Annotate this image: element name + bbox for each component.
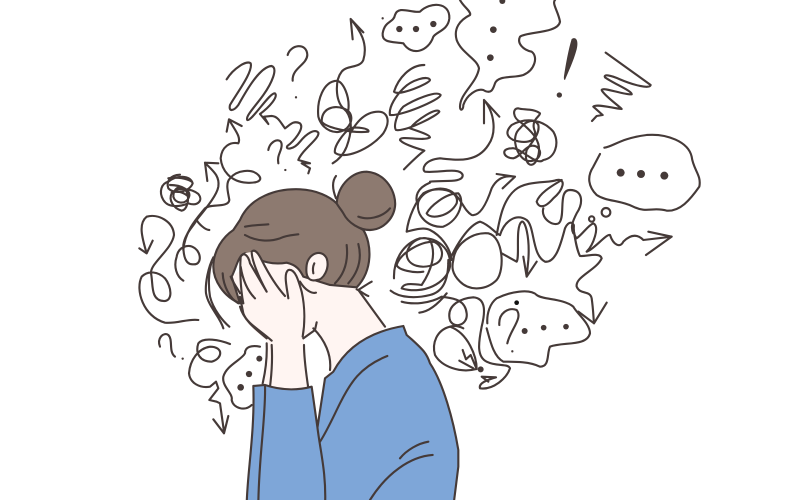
icon: question mark lower xyxy=(159,334,184,360)
loop xyxy=(175,220,200,281)
icon: small question mark xyxy=(268,140,286,171)
arrow: upward looping xyxy=(183,119,260,250)
neck and face skin xyxy=(232,260,387,383)
light bulb xyxy=(434,326,484,372)
small down arrow xyxy=(502,222,537,277)
sweater folds xyxy=(320,356,433,500)
ear xyxy=(306,253,328,280)
arrow: up to bubble xyxy=(424,100,499,182)
arrow pointing right xyxy=(573,223,672,255)
scribble ball xyxy=(504,108,556,165)
arrow: up with knot xyxy=(333,19,365,163)
big oval xyxy=(448,222,502,288)
loose hair left xyxy=(206,257,372,328)
forearm and hand xyxy=(240,251,310,390)
tall loops xyxy=(497,180,581,235)
wave to down arrow xyxy=(500,217,607,323)
doodles: upper left squiggles xyxy=(183,19,388,250)
hair strands xyxy=(223,208,390,303)
icon: question mark top xyxy=(288,46,307,98)
long wavy bubble xyxy=(456,0,560,110)
doodles: lower left squiggles xyxy=(139,175,262,433)
curl with arrow xyxy=(139,216,198,323)
hair strand by bun xyxy=(333,176,336,198)
arrow with tangle xyxy=(407,174,515,260)
squiggle to down arrow xyxy=(189,340,230,433)
chin and neck lines xyxy=(303,290,385,370)
zigzag right xyxy=(592,53,651,121)
small circles xyxy=(589,208,610,222)
blob with question mark and dots xyxy=(487,291,590,367)
spiral squiggle xyxy=(390,65,441,169)
speech bubble xyxy=(589,135,700,211)
hair bun xyxy=(337,172,395,230)
blob xyxy=(223,346,262,409)
arrow: second upward xyxy=(197,163,219,230)
zigzag squiggle xyxy=(227,63,318,173)
figure: woman holding her head xyxy=(206,172,395,390)
scribble loops xyxy=(318,81,388,155)
cloud with three dots xyxy=(382,5,449,51)
hair xyxy=(206,172,395,328)
doodles: upper right bubbles and arrows xyxy=(382,0,700,211)
sweater sleeve xyxy=(247,385,325,500)
long loop to arrow xyxy=(391,260,510,388)
scribble ball left xyxy=(394,238,450,290)
sleeve fold xyxy=(258,386,265,500)
doodles: right tangle, blob and arrows xyxy=(391,174,672,388)
sweater xyxy=(247,326,458,500)
scribble ball xyxy=(161,175,200,211)
icon: exclamation mark xyxy=(557,38,577,98)
sweater body xyxy=(317,326,458,500)
